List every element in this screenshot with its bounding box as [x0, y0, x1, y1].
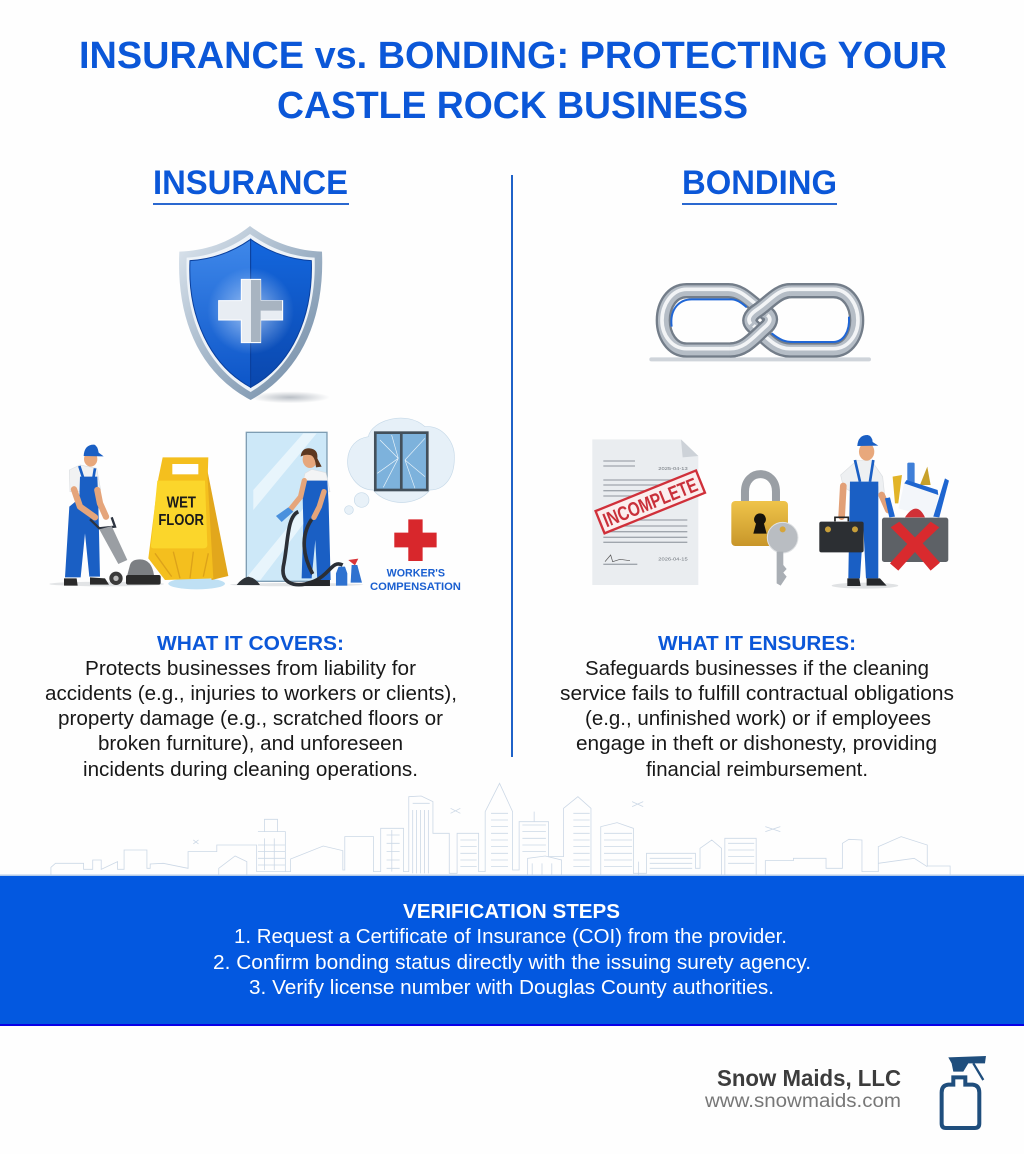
- text block: what it covers: incidents during cleaning operations.: [83, 759, 418, 781]
- wet floor sign: [148, 457, 228, 589]
- panel: verification steps: 3. Verify license number with Douglas County authorities.: [249, 977, 774, 999]
- skyline illustration: [0, 783, 1024, 875]
- text block: what it covers: broken furniture), and unforeseen: [98, 733, 403, 755]
- text block: what it covers: WHAT IT COVERS:: [157, 633, 344, 655]
- icon: spray bottle: [942, 1056, 986, 1128]
- heading: insurance: INSURANCE: [153, 164, 348, 202]
- worker with floor machine: [49, 445, 164, 586]
- padlock and key: [731, 474, 798, 586]
- workers compensation cross: WORKER'S: [387, 568, 445, 580]
- glass panel with cleaner: [230, 432, 363, 586]
- illustration: insurance risks: [49, 418, 461, 593]
- worker with briefcase and toolbox: [819, 435, 949, 589]
- text block: what it ensures: service fails to fulfill contractual obligations: [560, 683, 954, 705]
- text block: what it ensures: WHAT IT ENSURES:: [658, 633, 856, 655]
- panel: verification steps: VERIFICATION STEPS: [403, 901, 620, 923]
- workers compensation cross: [370, 519, 461, 593]
- icon: shield with cross: [179, 226, 330, 403]
- footer: company name: [704, 1065, 901, 1112]
- title: [79, 35, 947, 127]
- incomplete document: 2025-04-13: [658, 466, 688, 472]
- footer: company name: www.snowmaids.com: [704, 1091, 901, 1112]
- wet floor sign: FLOOR: [158, 512, 204, 529]
- text block: what it ensures: engage in theft or dishonesty, providing: [576, 733, 937, 755]
- title: CASTLE ROCK BUSINESS: [277, 85, 748, 127]
- text block: what it ensures: financial reimbursement.: [646, 759, 868, 781]
- wet floor sign: WET: [167, 495, 196, 512]
- text block: what it ensures: [560, 633, 954, 781]
- thought bubble with broken window: [345, 418, 454, 514]
- text block: what it covers: Protects businesses from liability for: [85, 658, 416, 680]
- illustration: bonding risks: [592, 435, 949, 589]
- text block: what it ensures: Safeguards businesses if the cleaning: [585, 658, 929, 680]
- heading: bonding: BONDING: [682, 164, 837, 202]
- text block: what it covers: [45, 633, 457, 781]
- panel: verification steps: 1. Request a Certificate of Insurance (COI) from the provider.: [234, 926, 787, 948]
- panel: verification steps: 2. Confirm bonding status directly with the issuing surety agency.: [213, 952, 811, 974]
- icon: chain link: [649, 289, 871, 361]
- footer: company name: Snow Maids, LLC: [717, 1065, 901, 1091]
- text block: what it covers: property damage (e.g., scratched floors or: [58, 708, 443, 730]
- incomplete document: 2026-04-15: [658, 557, 688, 563]
- workers compensation cross: COMPENSATION: [370, 581, 461, 593]
- text block: what it covers: accidents (e.g., injuries to workers or clients),: [45, 683, 457, 705]
- title: INSURANCE vs. BONDING: PROTECTING YOUR: [79, 35, 947, 77]
- panel: verification steps: [0, 874, 1024, 1026]
- text block: what it ensures: (e.g., unfinished work) or if employees: [585, 708, 931, 730]
- incomplete document: INCOMPLETE: [600, 474, 701, 532]
- incomplete document: [592, 439, 705, 585]
